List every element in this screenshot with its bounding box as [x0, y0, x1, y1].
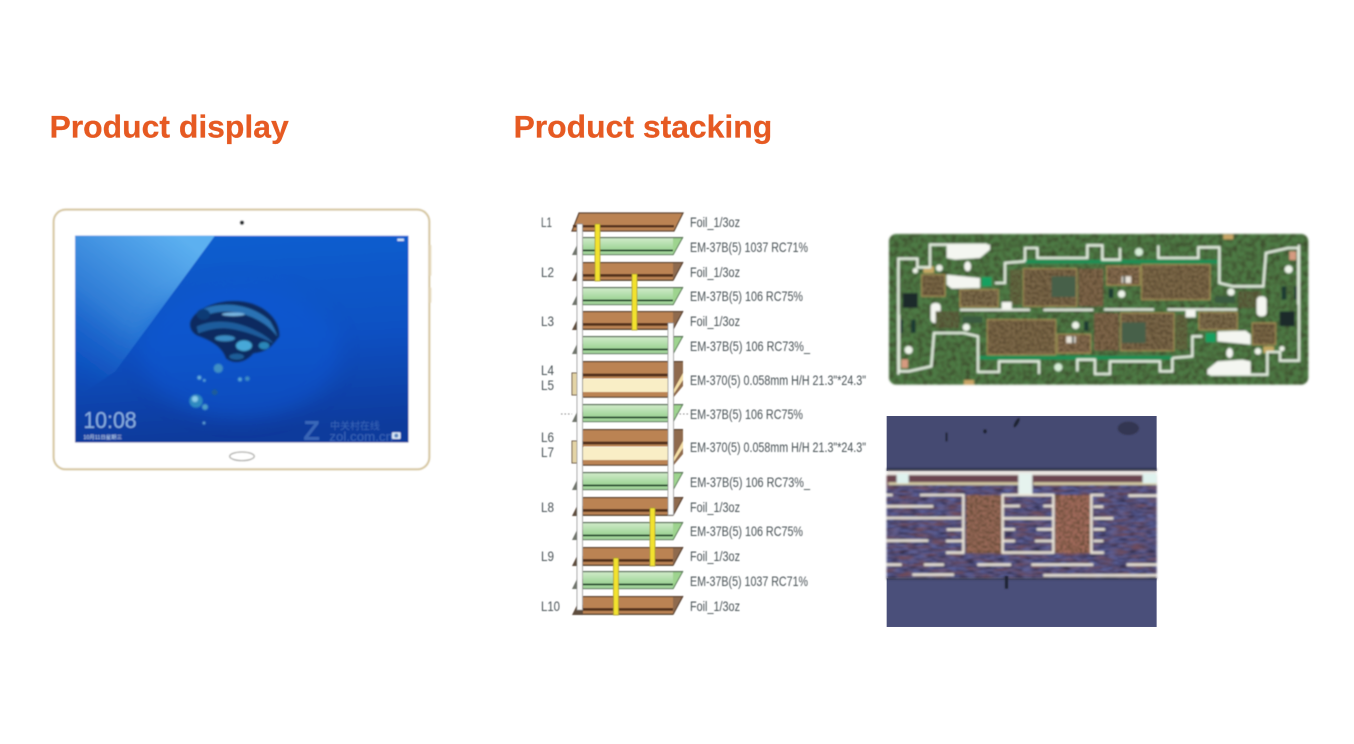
- layer names: L8: [541, 499, 554, 515]
- through via left: [577, 224, 582, 610]
- material labels: Foil_1/3oz: [690, 598, 740, 614]
- cross-section micrograph: [887, 416, 1157, 627]
- microvia L9-L10: [614, 558, 618, 615]
- watermark: Z: [303, 415, 320, 446]
- layer names: L4: [541, 362, 554, 378]
- layer names: L3: [541, 313, 554, 329]
- panel: product stacking: [514, 108, 1308, 627]
- layer names: L6: [541, 429, 554, 445]
- panel: product display: [50, 108, 431, 469]
- buried via right: [668, 323, 674, 515]
- dielectric core: [887, 485, 1157, 578]
- microvia L8-L9: [650, 508, 655, 566]
- copper filled vias: [966, 495, 1001, 553]
- material labels: EM-370(5) 0.058mm H/H 21.3"*24.3": [690, 372, 866, 388]
- layer names: L9: [541, 548, 554, 564]
- tablet photo: [54, 210, 431, 469]
- camera shortcut icon: [392, 432, 401, 439]
- material labels: EM-37B(5) 106 RC73%_: [690, 338, 810, 354]
- layer names: L10: [541, 598, 560, 614]
- layer names: L1: [541, 214, 552, 230]
- material labels: EM-37B(5) 1037 RC71%: [690, 573, 808, 589]
- material labels: [690, 214, 866, 614]
- microvia L1-L2: [595, 224, 600, 281]
- layer names: L5: [541, 377, 554, 393]
- watermark: [303, 420, 394, 442]
- layer names: L7: [541, 444, 554, 460]
- layer names: [541, 214, 560, 614]
- material labels: EM-37B(5) 1037 RC71%: [690, 239, 808, 255]
- material labels: EM-37B(5) 106 RC75%: [690, 406, 803, 422]
- material labels: EM-37B(5) 106 RC73%_: [690, 474, 810, 490]
- material labels: Foil_1/3oz: [690, 214, 740, 230]
- material labels: EM-370(5) 0.058mm H/H 21.3"*24.3": [690, 439, 866, 455]
- material labels: Foil_1/3oz: [690, 499, 740, 515]
- watermark: 中关村在线: [330, 419, 380, 432]
- resin top and bottom: [887, 416, 1157, 471]
- material labels: Foil_1/3oz: [690, 264, 740, 280]
- material labels: EM-37B(5) 106 RC75%: [690, 523, 803, 539]
- microvia L2-L3: [632, 274, 637, 330]
- watermark: zol.com.cn: [329, 429, 393, 444]
- lock screen date: 10月11日星期三: [83, 434, 122, 441]
- plated walls and inner traces: [887, 495, 1157, 575]
- layer L1 foil: [572, 213, 683, 231]
- tablet body: [54, 210, 429, 469]
- heading: product display: Product display: [50, 108, 289, 144]
- material labels: EM-37B(5) 106 RC75%: [690, 288, 803, 304]
- tablet screen: [75, 236, 409, 446]
- top copper band: [887, 475, 1157, 485]
- water droplet artwork: [189, 301, 279, 424]
- heading: product stacking: Product stacking: [514, 108, 772, 144]
- material labels: Foil_1/3oz: [690, 313, 740, 329]
- layer stack-up diagram: [541, 213, 866, 615]
- layer names: L2: [541, 264, 554, 280]
- lock screen clock: 10:08: [83, 407, 137, 433]
- material labels: Foil_1/3oz: [690, 548, 740, 564]
- scratches: [946, 417, 1139, 589]
- PCB board photo: [889, 234, 1308, 385]
